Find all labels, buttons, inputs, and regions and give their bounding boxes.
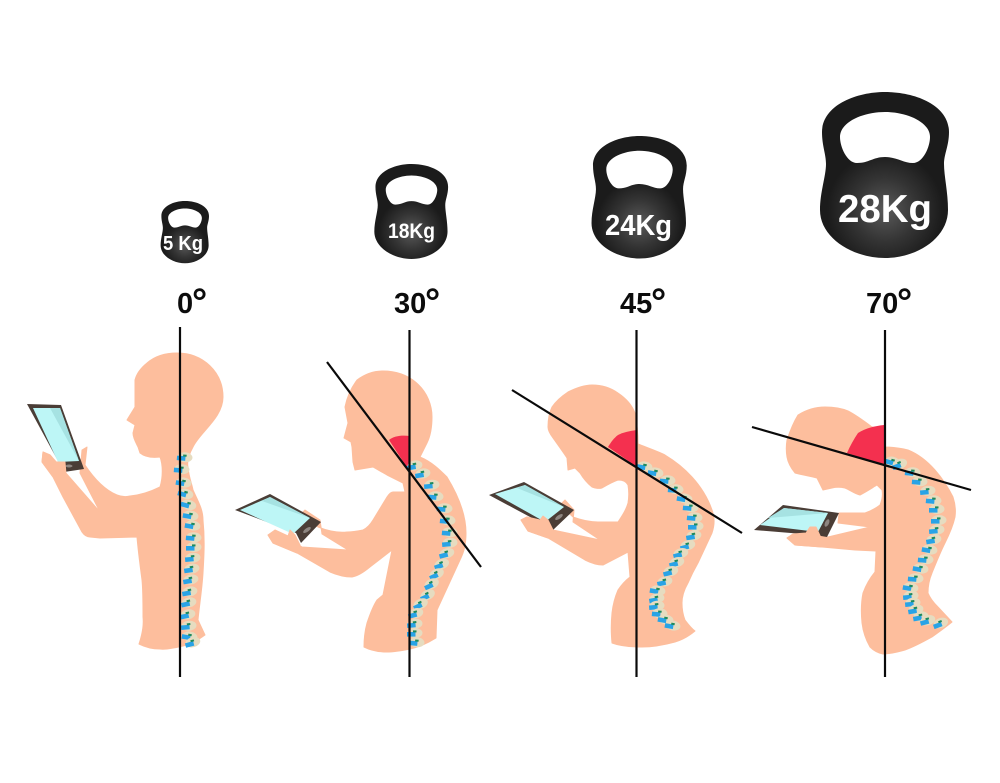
- spine: [884, 455, 950, 630]
- vertical reference line: [408, 330, 411, 677]
- tablet: [235, 494, 321, 543]
- silhouette: [42, 353, 223, 649]
- silhouette: [268, 371, 466, 652]
- vertical reference line: [635, 330, 638, 677]
- tablet: [489, 482, 574, 530]
- angle label: 0 degrees: 0: [177, 288, 193, 320]
- angle label: 70 degrees: °: [897, 282, 912, 324]
- tablet: [27, 404, 84, 472]
- vertical reference line: [884, 330, 886, 677]
- figure: 45 degree posture: [489, 330, 742, 677]
- angle label: 0 degrees: °: [192, 282, 207, 324]
- tilt line: [752, 427, 971, 490]
- angle label: 30 degrees: 30: [394, 288, 426, 320]
- silhouette: [786, 407, 955, 654]
- vertical reference line: [179, 327, 181, 677]
- hand over tablet: [521, 516, 553, 538]
- tilt line: [512, 390, 742, 533]
- angle label: 45 degrees: °: [651, 282, 666, 324]
- kettlebell: 5 Kg: 5 Kg: [163, 233, 203, 255]
- kettlebell: 28 Kg: [820, 92, 949, 258]
- angle label: 45 degrees: 45: [620, 288, 652, 320]
- angle label: 70 degrees: 70: [866, 288, 898, 320]
- kettlebell: 18 Kg: 18Kg: [388, 220, 435, 243]
- kettlebell: 5 Kg: [161, 201, 209, 263]
- kettlebell: 28 Kg: 28Kg: [838, 188, 932, 231]
- kettlebell: 24 Kg: [592, 136, 687, 259]
- spine: [636, 460, 704, 632]
- tilt line: [327, 362, 481, 567]
- kettlebell: 18 Kg: [374, 164, 448, 259]
- figure: 70 degree posture: [752, 330, 971, 677]
- angle label: 30 degrees: °: [425, 282, 440, 324]
- spine: [406, 459, 458, 648]
- figure: 30 degree posture: [235, 330, 481, 677]
- neck strain wedge: [847, 425, 884, 465]
- silhouette: [521, 385, 714, 647]
- hand over tablet: [268, 530, 300, 553]
- figure: 0 degree posture: [27, 327, 223, 677]
- neck strain wedge: [389, 436, 410, 472]
- hand over tablet: [42, 452, 66, 477]
- kettlebell: 24 Kg: 24Kg: [605, 210, 672, 242]
- neck strain wedge: [608, 430, 637, 467]
- tablet: [754, 505, 839, 537]
- hand over tablet: [787, 527, 822, 547]
- spine: [174, 452, 202, 649]
